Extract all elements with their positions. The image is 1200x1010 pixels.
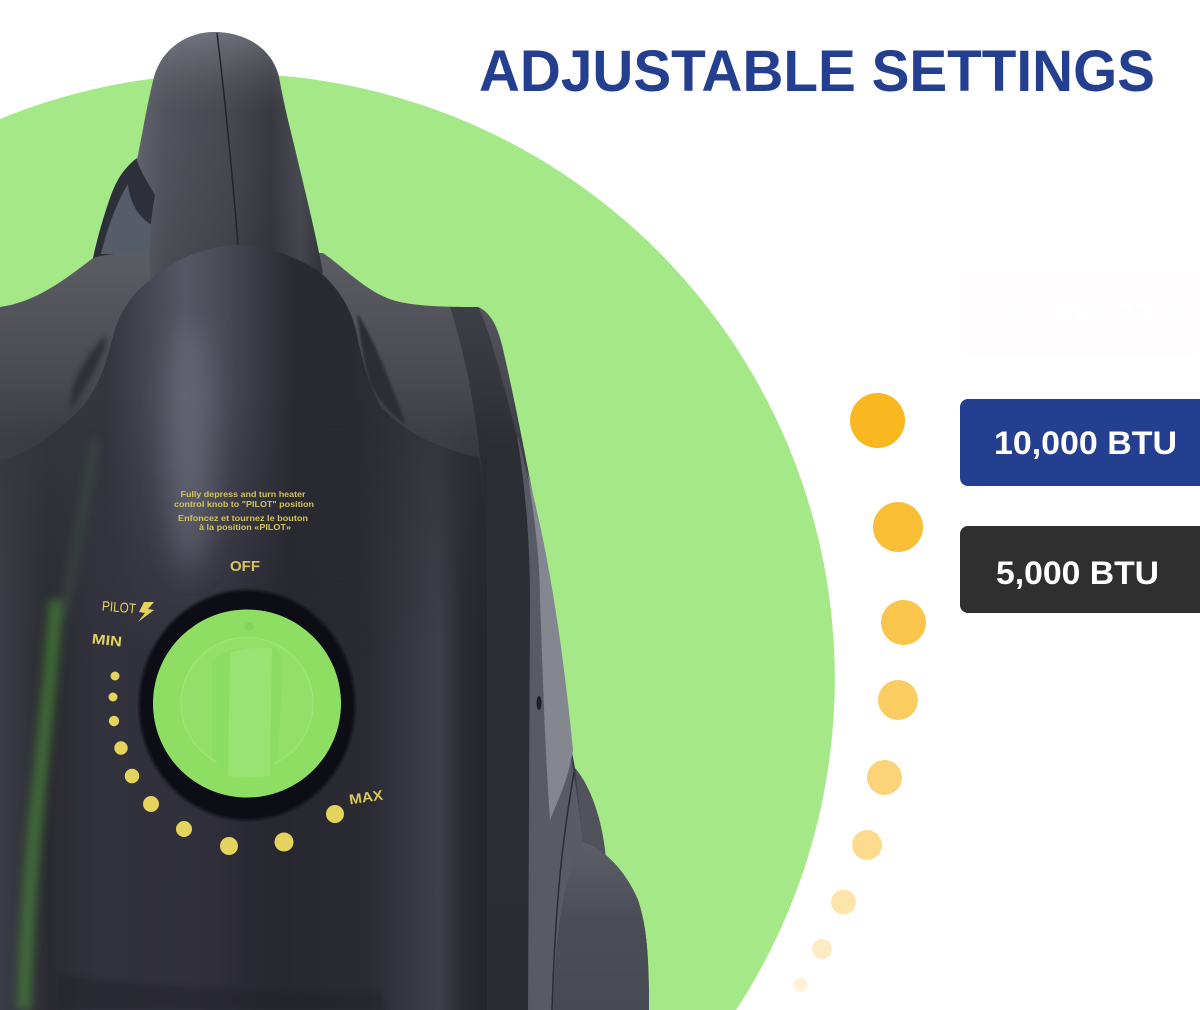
instruction text [174,489,314,532]
knob indicator dot [244,622,254,632]
icon: lightning bolt [138,602,154,622]
soft highlight on upper dome [168,320,212,570]
lower side panel [487,437,649,1010]
BTU label: 10,000 BTU [960,399,1200,486]
handle [137,32,323,300]
temperature scale dots [108,672,344,855]
knob inner disc [181,638,313,770]
heat level dots [794,393,926,992]
side seam line [552,772,574,1010]
MIN label: MIN [91,630,123,650]
knob grip face [228,648,272,777]
dark crescent right of dome [357,313,406,425]
BTU label: 5,000 BTU: 5,000 BTU [996,555,1159,591]
light side highlight [527,470,573,820]
heater product illustration [0,32,649,1010]
title: ADJUSTABLE SETTINGS [479,39,1155,104]
OFF label: OFF [230,558,260,575]
instruction text: Enfoncez et tournez le bouton [178,513,308,523]
darker base band [58,975,387,1010]
instruction text: Fully depress and turn heater [180,489,306,499]
green reflection streak upper [62,440,95,620]
instruction text: à la position «PILOT» [199,522,291,532]
lower bump shell [553,842,649,1010]
handle seam [217,33,238,245]
instruction text: control knob to "PILOT" position [174,499,314,509]
lower body fill [34,468,447,1010]
rear panel inner facet [101,184,152,254]
dark vertical band [450,307,530,1010]
rear lower bump [575,768,606,870]
central dome body [0,245,487,1010]
PILOT label: PILOT [101,598,137,616]
left shoulder shading [70,335,106,410]
rear panel behind handle [93,158,175,258]
knob base [153,610,341,798]
ghost BTU label: faded 15,000 BTU [960,270,1200,357]
knob grip [212,647,283,777]
screw hole [536,696,542,710]
ghost BTU label: faded 15,000 BTU: 15,000 BTU [998,297,1181,333]
knob recess [139,590,355,820]
heater body silhouette [0,253,649,1010]
handle top highlight [137,32,323,300]
BTU label: 5,000 BTU [960,526,1200,613]
green reflection streak [24,600,56,1010]
BTU label: 10,000 BTU: 10,000 BTU [994,425,1177,461]
green background circle [0,74,835,1010]
MAX label: MAX [348,787,385,807]
